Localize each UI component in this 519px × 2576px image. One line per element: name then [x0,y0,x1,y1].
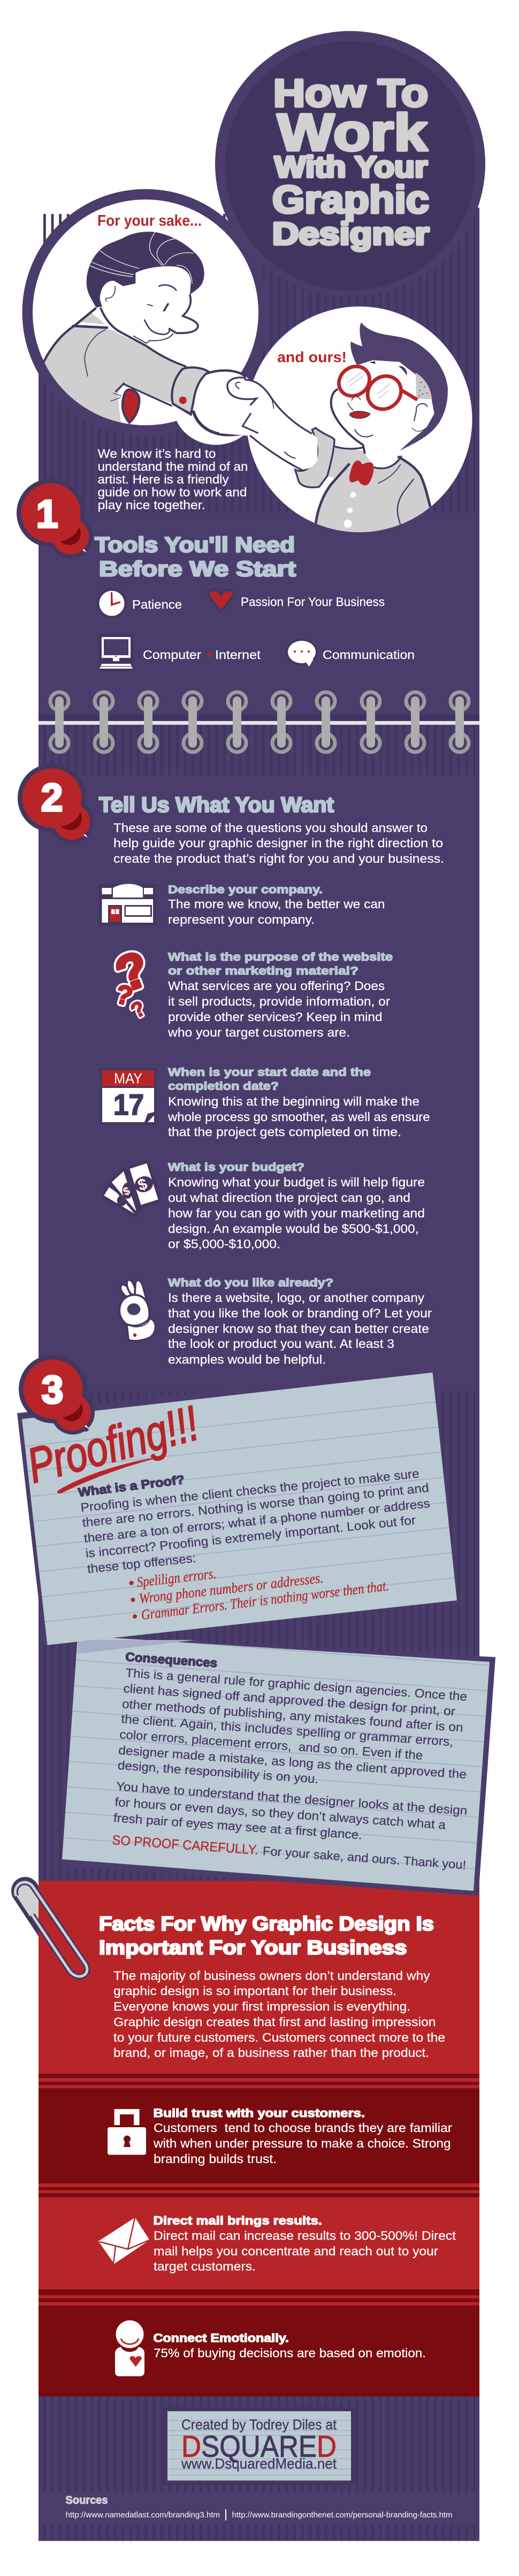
facts panel background [39,1881,479,2075]
block: purpose: who your target customers are. [167,1025,350,1039]
note paper: consequences: You have to understand that the designer looks at the design [116,1779,468,1818]
block: purpose: or other marketing material? [168,965,358,977]
block: what do you like [168,1277,432,1366]
label: patience: Patience [132,597,182,611]
sources: http://www.namedatlast.com/branding3.htm [65,2511,220,2519]
facts intro: Everyone knows your first impression is everything. [113,1999,410,2013]
text: connect emotionally [153,2331,426,2360]
proof explanation: there are a ton of errors; what if a phone number or address [83,1496,431,1545]
proof explanation [77,1466,431,1576]
pin: step 3: 3 [42,1368,63,1412]
sources: Sources [65,2494,108,2506]
text: build trust: with when under pressure to make a choice. Strong [153,2136,451,2150]
icon: question marks: ? [127,996,150,1023]
intro text: artist. Here is a friendly [97,472,229,486]
underline swoosh [58,1459,152,1493]
proof explanation: these top offenses: [87,1551,196,1576]
fact band: connect emotionally [39,2289,479,2396]
title badge [215,31,485,296]
block: what do you like: designer know so that they can better create [168,1322,429,1336]
striped texture: header [39,214,479,513]
title badge: Designer [272,217,429,251]
block: what do you like: that you like the look or branding of? Let your [168,1306,432,1320]
text: direct mail: target customers. [154,2259,256,2273]
icon: padlock [108,2109,146,2155]
icon: envelope [98,2218,150,2264]
note paper: consequences: This is a general rule for graphic design agencies. Once the [125,1666,468,1704]
title badge: With Your [274,150,428,183]
block: purpose: it sell products, provide information, or [168,994,390,1008]
note paper: consequences: for hours or even days, so they don’t always catch what a [115,1795,446,1832]
pin: step 3 [19,1355,95,1435]
note paper: consequences: color errors, placement errors, and so on. Even if the [119,1727,423,1762]
top offenses list: Spelilign errors. [136,1565,217,1590]
pin: step 1 [17,479,93,558]
note paper: consequences: For your sake, and ours. Thank you! [262,1844,467,1872]
text: connect emotionally: 75% of buying decisions are based on emotion. [154,2346,426,2360]
note paper: consequences: other methods of publishing, any mistakes found after is on [121,1697,464,1735]
facts intro: The majority of business owners don’t understand why [113,1968,430,1982]
heading: facts [99,1913,434,1959]
block: purpose [167,951,393,1039]
caption: and ours: and ours! [277,349,347,365]
facts intro: to your future customers. Customers connect more to the [113,2030,445,2044]
block: budget: design. An example would be $500-$1,000, [168,1222,418,1236]
note paper: consequences [54,1632,498,1896]
credit card: DSQUARED [181,2429,337,2464]
block: purpose: What is the purpose of the website [168,951,393,963]
note paper: consequences: fresh pair of eyes may see at a first glance. [113,1811,363,1842]
fact band: build trust [39,2074,479,2183]
block: purpose: provide other services? Keep in mind [168,1010,382,1024]
icon: question marks: ? [113,979,136,1011]
text: build trust: Customers tend to choose brands they are familiar [154,2121,452,2135]
heading: tools [95,533,296,581]
label: passion: Passion For Your Business [241,595,385,609]
intro text: play nice together. [97,498,205,512]
block: budget: out what direction the project can go, and [168,1191,410,1205]
pin: step 1: 1 [36,493,58,536]
pin: step 2: 2 [41,776,63,819]
block: dates: Knowing this at the beginning will make the [168,1094,419,1108]
icon: calendar: 17 [113,1088,144,1121]
top offenses list: Grammar Errors. Their is nothing worse then that. [140,1577,390,1623]
title badge: Work [277,103,428,162]
block: what do you like: examples would be helpful. [168,1352,326,1366]
facts intro: brand, or image, of a business rather than the product. [113,2045,429,2059]
icon: computer [98,634,134,671]
block: budget: What is your budget? [168,1161,304,1174]
facts intro: Graphic design creates that first and lasting impression [113,2015,436,2029]
text: connect emotionally: Connect Emotionally. [153,2331,289,2345]
label: computer + internet: Computer [143,648,201,662]
text: build trust [153,2106,452,2166]
block: purpose: What services are you offering? Does [168,979,385,993]
icon: calendar: MAY [114,1070,142,1087]
label: computer + internet: + [205,648,213,662]
block: describe your company: represent your company. [168,913,315,926]
intro text: understand the mind of an [97,459,248,473]
text: build trust: Build trust with your customers. [153,2106,365,2120]
proof explanation: there are no errors. Nothing is worse than going to print and [81,1481,430,1530]
icon: money [102,1162,160,1216]
icon: question marks: ? [109,941,156,1002]
icon: smiling person [115,2320,144,2376]
section 2 intro: create the product that’s right for you and your business. [113,852,444,865]
label: computer + internet: Internet [215,648,261,662]
note paper: consequences: client has signed off and approved the design for print, or [123,1681,456,1718]
section 2 intro [113,821,444,865]
block: budget: Knowing what your budget is will help figure [168,1175,425,1189]
striped texture: binding [39,725,479,776]
block: dates: completion date? [168,1080,279,1092]
icon: question marks: ? [109,941,156,1002]
block: what do you like: What do you like already? [168,1277,333,1289]
icon: clock [97,588,127,618]
block: describe your company [168,884,385,926]
icon: money: $ [121,1184,132,1198]
proofing script title: Proofing!!! [22,1396,204,1493]
top offenses list: Wrong phone numbers or addresses. [138,1569,324,1606]
label: computer + internet [143,648,261,662]
credit card: www.DsquaredMedia.net [181,2456,337,2472]
facts intro: graphic design is so important for their business. [113,1984,396,1998]
fact band: direct mail [39,2183,479,2289]
note paper: consequences: Consequences [125,1650,218,1670]
icon: question marks: ? [113,979,136,1011]
icon: storefront [99,884,156,925]
intro text: We know it’s hard to [97,447,216,461]
sources [65,2494,453,2520]
credit card [163,2407,355,2485]
credit card: Created by Todrey Diles at [181,2417,337,2433]
proof explanation: What is a Proof? [77,1473,185,1499]
notebook binding [39,692,479,752]
proof explanation: is incorrect? Proofing is extremely important. Look out for [85,1513,416,1560]
block: what do you like: Is there a website, logo, or another company [168,1291,425,1305]
section 2 intro: These are some of the questions you should answer to [113,821,428,834]
footer stripes [39,2396,479,2493]
icon: money: $ [136,1175,149,1194]
heading: facts: Important For Your Business [99,1936,407,1959]
icon: question marks: ? [127,996,150,1023]
paperclip [15,1882,87,1976]
text: direct mail: mail helps you concentrate and reach out to your [154,2244,438,2258]
note paper: consequences: the client. Again, this includes spelling or grammar errors, [121,1712,454,1749]
heading: tools: Tools You'll Need [95,533,295,557]
text: build trust: branding builds trust. [154,2152,277,2166]
title badge: Graphic [272,179,429,221]
footer stripes lower [39,2525,479,2541]
text: direct mail: Direct mail can increase results to 300-500%! Direct [154,2228,456,2242]
icon: heart [208,590,234,612]
icon: ok hand [120,1280,155,1340]
block: describe your company: The more we know, the better we can [168,897,385,911]
block: dates: whole process go smoother, as well as ensure [167,1110,430,1124]
note paper: consequences: designer made a mistake, as long as the client approved the [118,1743,467,1781]
section 2 intro: help guide your graphic designer in the right direction to [113,836,443,850]
heading: tools: Before We Start [99,557,296,581]
block: budget [168,1161,425,1251]
icon: calendar [100,1068,157,1125]
block: what do you like: the look or product you want. At least 3 [168,1337,394,1351]
striped texture: proofing [39,1391,479,1881]
proof explanation: Proofing is when the client checks the project to make sure [80,1466,420,1514]
designer bubble with glasses [219,306,472,535]
block: budget: how far you can go with your marketing and [168,1206,425,1220]
note paper: proofing [16,1367,465,1651]
pin: step 2 [18,764,94,844]
businessman [43,232,258,445]
note paper: consequences: SO PROOF CAREFULLY. [112,1833,259,1858]
intro text: guide on how to work and [97,485,247,499]
intro text [97,447,248,512]
sources: http://www.brandingonthenet.com/personal-branding-facts.htm [232,2511,453,2519]
text: direct mail [153,2214,456,2273]
designer character [219,323,448,535]
label: communication: Communication [323,648,415,662]
block: budget: or $5,000-$10,000. [168,1237,280,1251]
block: describe your company: Describe your company. [168,884,323,896]
heading: tell us what you want: Tell Us What You Want [99,793,334,817]
heading: facts: Facts For Why Graphic Design Is [99,1913,434,1935]
client bubble with businessman [22,189,269,445]
title badge: How To [273,72,428,115]
note paper: consequences: design, the responsibility is on you. [117,1758,319,1786]
caption: for your sake: For your sake... [97,212,202,229]
background panel [39,208,479,2541]
icon: speech bubble [286,639,318,666]
text: direct mail: Direct mail brings results. [153,2214,322,2227]
facts intro [113,1968,445,2059]
block: dates [167,1067,430,1139]
block: dates: When is your start date and the [168,1067,371,1078]
block: dates: that the project gets completed on time. [168,1125,401,1139]
